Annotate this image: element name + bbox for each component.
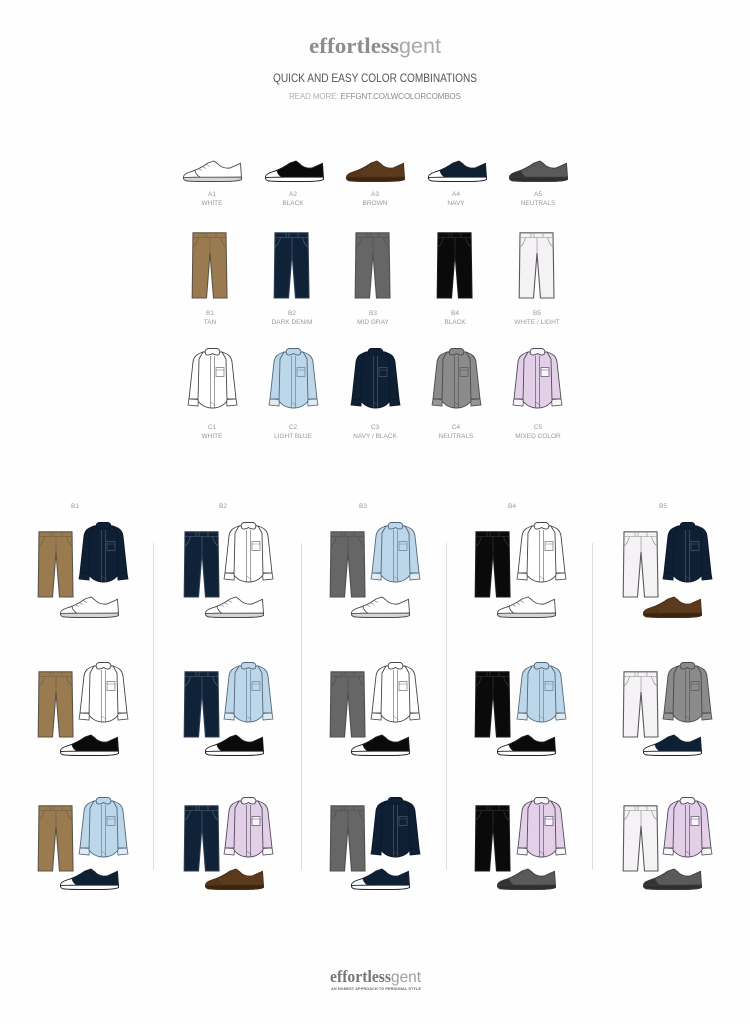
shirt C3 navy / black: C3 xyxy=(371,424,380,431)
pants B2 dark denim: DARK DENIM xyxy=(272,319,312,326)
outfit: denim, mixed shirt, brown shoes xyxy=(184,798,273,890)
shirt C4 neutrals: NEUTRALS xyxy=(439,433,474,440)
column label B4: B4 xyxy=(508,503,516,510)
logo: effortless gent: effortless xyxy=(309,33,399,58)
shirt C5 mixed color: MIXED COLOR xyxy=(515,433,561,440)
shoe A4 navy: NAVY xyxy=(447,200,465,207)
footer logo and tagline: effortless xyxy=(330,967,391,986)
outfit: black pants, blue shirt, black shoes xyxy=(475,662,566,756)
pants B4 black: B4 xyxy=(451,310,459,317)
outfit: black pants, mixed shirt, neutral shoes xyxy=(475,798,566,890)
title: QUICK AND EASY COLOR COMBINATIONS xyxy=(273,73,477,85)
shirt C4 neutrals xyxy=(432,348,481,440)
outfit: tan pants, navy shirt, white shoes xyxy=(38,522,128,618)
column: B2 outfits xyxy=(184,503,273,890)
outfit: gray pants, navy shirt, navy shoes xyxy=(330,798,420,890)
pants B3 mid gray: MID GRAY xyxy=(357,319,389,326)
outfit: white pants, gray shirt, navy shoes xyxy=(623,662,712,756)
shirt C2 light blue: LIGHT BLUE xyxy=(274,433,313,440)
read more link: READ MORE: EFFGNT.CO/LWCOLORCOMBOS xyxy=(289,92,461,101)
footer logo and tagline: gent xyxy=(391,969,422,986)
column: B3 outfits xyxy=(330,503,420,890)
pants B2 dark denim: B2 xyxy=(288,310,296,317)
pants B5 white / light: WHITE / LIGHT xyxy=(514,319,560,326)
column: B5 outfits xyxy=(623,503,712,890)
shoe A1 white xyxy=(183,161,242,207)
footer logo and tagline: AN HONEST APPROACH TO PERSONAL STYLE xyxy=(331,987,421,991)
outfit: denim, white shirt, white shoes xyxy=(184,522,273,618)
column label B5: B5 xyxy=(659,503,667,510)
shoe A5 neutrals: NEUTRALS xyxy=(521,200,556,207)
shirt C3 navy / black: NAVY / BLACK xyxy=(353,433,398,440)
shirt C1 white: WHITE xyxy=(202,433,223,440)
pants B1 tan: B1 xyxy=(206,310,214,317)
column: B1 outfits xyxy=(38,503,128,890)
pants B1 tan xyxy=(192,233,227,326)
column dividers xyxy=(154,543,592,870)
header xyxy=(273,33,477,101)
panel: shirts key xyxy=(188,348,562,440)
shirt C4 neutrals: C4 xyxy=(452,424,461,431)
outfit: black pants, white shirt, white shoes xyxy=(475,522,566,618)
shoe A2 black: A2 xyxy=(289,191,297,198)
column label B2: B2 xyxy=(219,503,227,510)
shirt C1 white xyxy=(188,348,237,440)
pants B1 tan: TAN xyxy=(204,319,217,326)
pants B4 black: BLACK xyxy=(444,319,466,326)
shoe A3 brown xyxy=(346,161,404,207)
shirt C5 mixed color: C5 xyxy=(534,424,543,431)
pants B5 white / light: B5 xyxy=(533,310,541,317)
shoe A3 brown: BROWN xyxy=(363,200,388,207)
shoe A5 neutrals: A5 xyxy=(534,191,542,198)
pants B4 black xyxy=(437,233,472,326)
shoe A5 neutrals xyxy=(509,161,568,207)
logo: effortless gent: gent xyxy=(399,35,441,58)
outfit: white pants, mixed shirt, neutral shoes xyxy=(623,798,712,890)
shirt C3 navy / black xyxy=(351,348,400,440)
panel: shoe key xyxy=(183,161,568,207)
outfit: denim, blue shirt, black shoes xyxy=(184,662,273,756)
pants B3 mid gray xyxy=(355,233,390,326)
shoe A2 black xyxy=(265,161,324,207)
footer logo and tagline xyxy=(330,967,422,991)
outfit: gray pants, white shirt, black shoes xyxy=(330,662,420,756)
outfit: tan pants, white shirt, black shoes xyxy=(38,662,128,756)
shirt C5 mixed color xyxy=(513,348,562,440)
panel: pants key xyxy=(192,233,560,326)
shirt C1 white: C1 xyxy=(208,424,217,431)
column label B3: B3 xyxy=(359,503,367,510)
outfit: tan pants, blue shirt, navy shoes xyxy=(38,798,128,890)
outfit: gray pants, blue shirt, white shoes xyxy=(330,522,420,618)
pants B3 mid gray: B3 xyxy=(369,310,377,317)
shoe A1 white: A1 xyxy=(208,191,216,198)
shoe A3 brown: A3 xyxy=(371,191,379,198)
pants B2 dark denim xyxy=(272,233,312,326)
shoe A4 navy xyxy=(428,161,486,207)
column: B4 outfits xyxy=(475,503,566,890)
shoe A4 navy: A4 xyxy=(452,191,460,198)
shoe A2 black: BLACK xyxy=(282,200,304,207)
pants B5 white / light xyxy=(514,233,560,326)
logo: effortless gent xyxy=(309,33,441,58)
shirt C2 light blue xyxy=(269,348,318,440)
shirt C2 light blue: C2 xyxy=(289,424,298,431)
shoe A1 white: WHITE xyxy=(202,200,223,207)
outfit: white pants, navy shirt, brown shoes xyxy=(623,522,712,618)
column label B1: B1 xyxy=(71,503,79,510)
